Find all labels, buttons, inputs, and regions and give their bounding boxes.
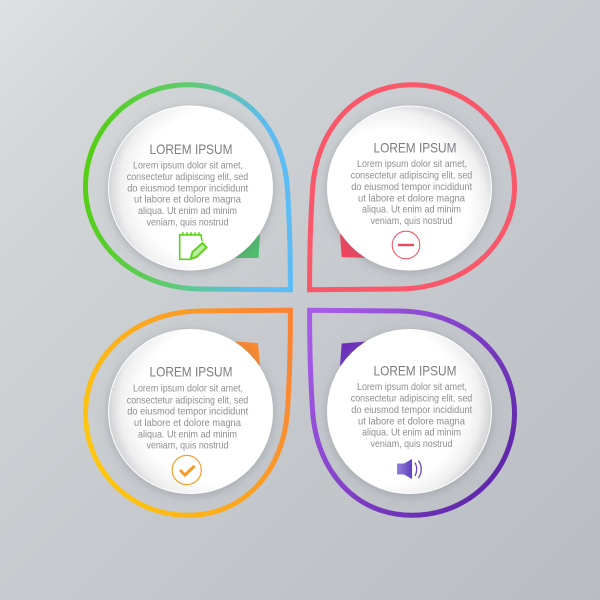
- heading: LOREM IPSUM: [374, 363, 456, 378]
- icon: speaker: [397, 459, 421, 479]
- white circle: [108, 106, 272, 270]
- text block: ut labore et dolore magna: [134, 418, 241, 429]
- text block: veniam, quis nostrud: [370, 216, 452, 227]
- text block: do eiusmod tempor incididunt: [351, 405, 472, 416]
- text block: aliqua. Ut enim ad minim: [138, 429, 237, 440]
- text block: aliqua. Ut enim ad minim: [362, 205, 461, 216]
- white circle: [328, 330, 492, 494]
- text block: [351, 159, 472, 227]
- heading: LOREM IPSUM: [150, 142, 232, 157]
- text block: [351, 382, 472, 450]
- text block: consectetur adipiscing elit, sed: [127, 395, 248, 406]
- text block: [127, 160, 248, 228]
- text block: consectetur adipiscing elit, sed: [351, 394, 472, 405]
- white circle: [108, 330, 272, 494]
- text block: [127, 384, 248, 452]
- text block: veniam, quis nostrud: [146, 217, 228, 228]
- text block: do eiusmod tempor incididunt: [351, 182, 472, 193]
- corner tab: purple: [340, 342, 366, 366]
- text block: consectetur adipiscing elit, sed: [127, 172, 248, 183]
- heading: LOREM IPSUM: [374, 140, 456, 156]
- corner tab: green: [233, 234, 260, 258]
- panel: bottom-left yellow-orange: [86, 310, 290, 515]
- text block: do eiusmod tempor incididunt: [127, 183, 248, 194]
- text block: Lorem ipsum dolor sit amet,: [133, 384, 243, 395]
- text block: veniam, quis nostrud: [370, 439, 452, 450]
- teardrop outline: red: [310, 85, 514, 290]
- teardrop outline: purple: [310, 310, 514, 515]
- panel: top-right red: [310, 85, 514, 290]
- icon: minus in circle: [392, 231, 420, 259]
- teardrop outline: green-blue: [86, 85, 290, 290]
- corner tab: red: [340, 234, 368, 258]
- heading: LOREM IPSUM: [150, 365, 232, 380]
- text block: ut labore et dolore magna: [358, 416, 465, 427]
- teardrop outline: yellow-orange: [86, 310, 290, 515]
- text block: Lorem ipsum dolor sit amet,: [357, 382, 467, 393]
- text block: ut labore et dolore magna: [358, 193, 465, 204]
- icon: check in circle: [172, 455, 201, 485]
- text block: veniam, quis nostrud: [146, 441, 228, 452]
- text block: aliqua. Ut enim ad minim: [362, 428, 461, 439]
- text block: do eiusmod tempor incididunt: [127, 407, 248, 418]
- text block: Lorem ipsum dolor sit amet,: [357, 159, 467, 170]
- corner tab: orange: [235, 342, 260, 366]
- text block: Lorem ipsum dolor sit amet,: [133, 160, 243, 171]
- text block: consectetur adipiscing elit, sed: [351, 171, 472, 182]
- panel: top-left green-blue: [86, 85, 290, 290]
- panel: bottom-right purple: [310, 310, 514, 515]
- icon: notepad and pencil: [180, 232, 206, 259]
- text block: ut labore et dolore magna: [134, 195, 241, 206]
- text block: aliqua. Ut enim ad minim: [138, 206, 237, 217]
- white circle: [328, 106, 492, 270]
